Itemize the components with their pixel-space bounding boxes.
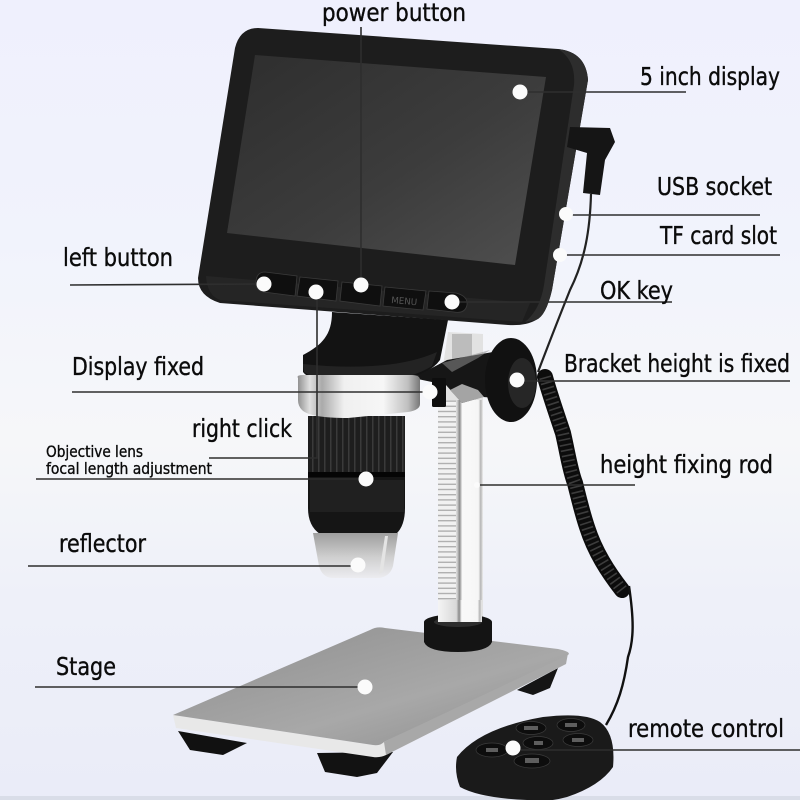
objective tube xyxy=(308,416,405,534)
label: 5 inch display: 5 inch display xyxy=(640,62,780,91)
rod collar xyxy=(424,600,492,652)
label: height fixing rod: height fixing rod xyxy=(600,450,773,479)
label: OK key: OK key xyxy=(600,276,673,305)
label: Stage: Stage xyxy=(56,652,116,681)
coiled cable xyxy=(545,377,633,725)
height fixing rod xyxy=(438,332,483,632)
label: USB socket: USB socket xyxy=(657,172,772,201)
label: objective lens focal length adjustment xyxy=(46,442,212,478)
remote control xyxy=(456,715,613,800)
display unit xyxy=(198,28,588,325)
label: TF card slot: TF card slot xyxy=(659,221,777,250)
front buttons xyxy=(256,272,467,312)
label: Display fixed: Display fixed xyxy=(72,352,204,381)
screen xyxy=(227,55,546,265)
bracket xyxy=(413,350,497,407)
audio jack and cable xyxy=(538,127,615,372)
front buttons: MENU xyxy=(391,296,418,308)
reflector cap xyxy=(313,533,398,578)
microscope illustration xyxy=(173,28,633,800)
label: remote control: remote control xyxy=(628,714,784,743)
mounting arm xyxy=(303,312,448,383)
label: left button: left button xyxy=(63,243,173,272)
marker dots xyxy=(256,84,573,756)
stage base plate xyxy=(173,627,569,777)
silver ring xyxy=(298,375,420,418)
label: objective lens focal length adjustment: focal length adjustment xyxy=(46,459,212,478)
label: objective lens focal length adjustment: Objective lens xyxy=(46,442,143,461)
label: right click: right click xyxy=(192,414,292,443)
label: reflector: reflector xyxy=(59,529,147,558)
height knob xyxy=(485,338,537,422)
